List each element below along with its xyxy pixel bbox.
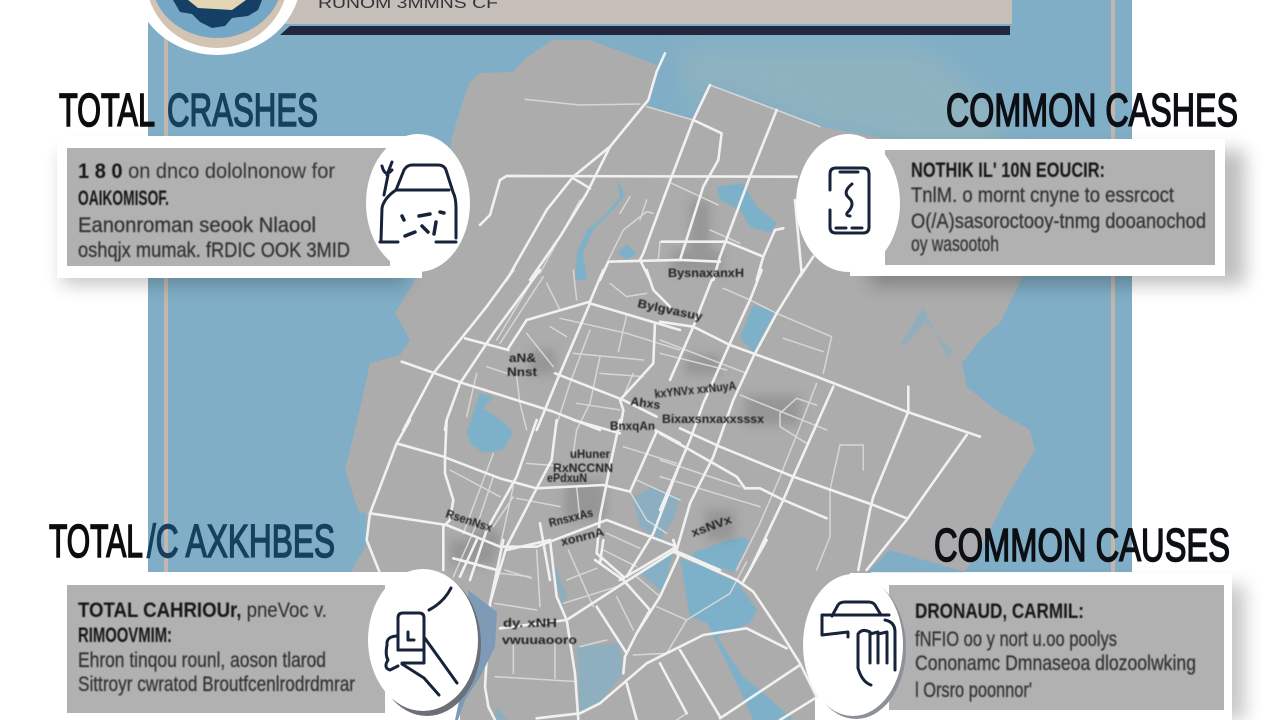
panel: common causes (bottom right) [803,573,1245,720]
map: land mass [345,40,1035,720]
text block: TnlM. o mornt cnyne to essrcoct [911,184,1174,207]
map: street labels: RxNCCNN [553,461,613,475]
map: east road network [660,270,980,570]
map: street labels: aN& [509,351,536,365]
text block [78,160,350,262]
text block: 1 8 0 on dnco dololnonow for [78,160,335,183]
map: street labels: ePdxuN [547,471,587,485]
text block: TOTAL CAHRIOUr, pneVoc v. [78,599,327,622]
icon: smartphone [830,168,869,233]
map: street labels: Bylgvasuy [636,296,704,324]
map: dark urban density patches [450,200,800,565]
text block [78,599,355,696]
heading: crashes word: CRASHES [167,84,318,136]
text block: Eanonroman seook Nlaool [78,214,316,237]
heading: axkhbes word: /C AXKHBES [147,515,335,567]
map: street labels: RnsxxAs [547,505,595,530]
text block [911,159,1206,256]
text block: fNFIO oo y nort u.oo poolys [915,628,1117,651]
map: south road network [460,540,817,720]
panel: total crashes (top left) [57,134,470,285]
icon: car and hand [822,602,895,685]
map: street labels: dy. xNH [503,616,557,630]
text block: oy wasootoh [911,233,999,256]
map background: water [148,0,1132,572]
icon: damaged car [380,162,456,242]
map: street labels: Nnst [507,365,537,379]
panel: common cashes (top right) [796,134,1245,285]
map: west road network [402,270,680,430]
map: street labels: xsNVx [689,512,734,540]
map: street labels: uHuner [570,447,610,461]
map: street labels: kxYNVx xxNuyA [654,378,737,401]
text block: OAIKOMISOF. [78,187,169,210]
map: street labels: xonrnA [559,525,606,549]
heading: total axkhbes: TOTAL [49,515,143,567]
header banner [280,0,1012,35]
badge emblem [133,0,301,55]
map: street labels: vwuuaooro [502,633,577,647]
text block: NOTHIK IL' 10N EOUCIR: [911,159,1105,182]
icon: hand holding phone [386,588,457,695]
text block: oshqjx mumak. fRDIC OOK 3MID [78,239,350,262]
panel: total crashes (bottom left) [55,569,497,720]
map: north road network [480,53,820,280]
text block: Sittroyr cwratod Broutfcenlrodrdmrar [78,673,355,696]
text block: DRONAUD, CARMIL: [915,600,1084,623]
text block: O(/A)sasoroctooy-tnmg dooanochod [911,210,1206,233]
map: street labels: Ahxs [630,394,662,412]
text block [915,600,1196,702]
map: street labels: Bixaxsnxaxxsssx [662,412,764,426]
text block: RIMOOVMIM: [78,624,172,647]
text block: Cononamc Dmnaseoa dlozoolwking [915,652,1196,675]
map: street labels: BysnaxanxH [668,266,744,280]
map: southwest road network [367,420,680,580]
map: street labels: RsenNsx [444,507,494,535]
map: lakes and rivers [360,180,965,720]
text block: l Orsro poonnor' [915,679,1032,702]
heading: total crashes: TOTAL [59,84,155,136]
map: street labels: BnxqAn [610,419,655,433]
text block: Ehron tinqou rounl, aoson tlarod [78,649,326,672]
map: street labels [444,266,764,647]
